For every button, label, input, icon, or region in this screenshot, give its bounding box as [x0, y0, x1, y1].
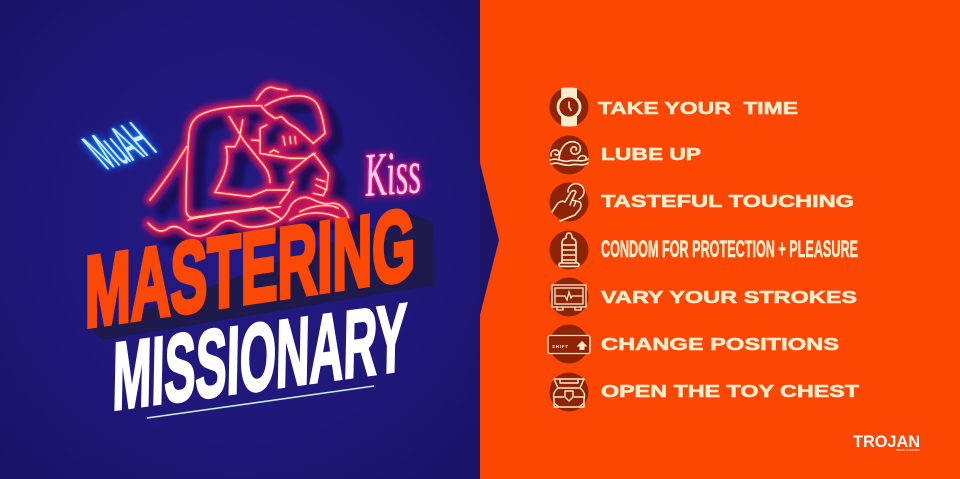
logo: Trojan: TROJAN: [853, 432, 920, 451]
list item: vary your strokes: VARY YOUR STROKES: [601, 287, 857, 307]
logo: Trojan: BRAND CONDOMS: [896, 448, 920, 452]
list item: vary your strokes: [550, 278, 857, 316]
title: Mastering with dark extruded block: MASTERING: [85, 188, 415, 349]
neon word: Kiss: Kiss: [362, 138, 423, 210]
list item: tasteful touching: TASTEFUL TOUCHING: [601, 191, 854, 211]
list item: lube up: [550, 136, 701, 174]
list item: change positions: SHIFT: [552, 344, 568, 349]
underline accent: [147, 386, 374, 418]
title: Mastering with dark extruded block: [85, 188, 435, 349]
arrow: navy chevron pointing right: [480, 163, 499, 315]
panel: orange right background: [480, 0, 960, 479]
illustration: neon couple: [148, 87, 360, 246]
panel: navy left background: [0, 0, 480, 479]
text: MISSIONARY: [112, 284, 408, 431]
list item: take your time: TAKE YOUR TIME: [598, 98, 798, 118]
list item: open the toy chest: OPEN THE TOY CHEST: [601, 381, 859, 401]
list item: lube up: LUBE UP: [601, 144, 701, 164]
list item: change positions: CHANGE POSITIONS: [601, 334, 839, 354]
list item: condom for protection + pleasure: [550, 230, 858, 270]
list item: take your time: [550, 88, 798, 126]
list item: tasteful touching: [550, 182, 854, 222]
list item: open the toy chest: [550, 372, 859, 412]
list item: change positions: [548, 324, 839, 364]
neon word: MuAH: MuAH: [71, 112, 167, 179]
